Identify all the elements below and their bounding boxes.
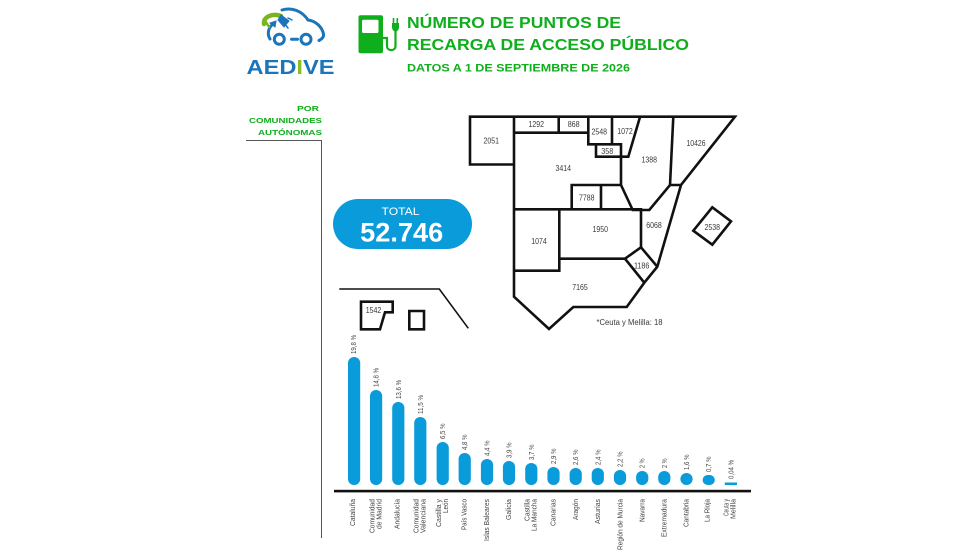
- category labels: Valenciana: [418, 498, 428, 533]
- section heading: por comunidades autónomas: AUTÓNOMAS: [258, 128, 322, 137]
- section heading: por comunidades autónomas: [249, 104, 322, 137]
- category labels: Comunidad: [368, 499, 376, 533]
- map values: 7788: [579, 194, 595, 202]
- icon: electric car: [264, 9, 324, 44]
- map outlines: [470, 117, 735, 329]
- percentage labels: 13,6 %: [394, 380, 403, 399]
- map values: 2051: [484, 136, 500, 146]
- footnote: Ceuta y Melilla: *Ceuta y Melilla: 18: [596, 318, 663, 327]
- total callout: [333, 199, 472, 249]
- category labels: Cantabria: [682, 498, 690, 527]
- category labels: Andalucía: [392, 498, 402, 529]
- map values: 1072: [617, 127, 633, 136]
- category labels: Asturias: [593, 499, 602, 524]
- map values: 10426: [686, 139, 706, 148]
- title: RECARGA DE ACCESO PÚBLICO: [407, 36, 689, 54]
- map: tile map of Spain: [339, 117, 735, 329]
- percentage labels: [349, 335, 735, 479]
- category labels: de Madrid: [374, 499, 384, 529]
- bar chart: share by autonomous community: [334, 335, 751, 550]
- category labels: Melilla: [728, 498, 738, 519]
- category labels: Extremadura: [660, 498, 668, 537]
- category labels: Islas Baleares: [482, 499, 491, 541]
- percentage labels: 19,8 %: [349, 335, 358, 354]
- map values: 7165: [572, 283, 588, 292]
- category labels: Región de Murcia: [616, 498, 624, 550]
- category labels: Comunidad: [412, 499, 420, 533]
- map values: 1074: [531, 237, 547, 246]
- map values: 2548: [592, 128, 608, 136]
- category labels: [348, 498, 738, 550]
- category labels: País Vasco: [460, 499, 468, 530]
- logo: AEDIVE: [246, 9, 334, 79]
- percentage labels: 3,7 %: [527, 444, 536, 460]
- category labels: Galicia: [504, 498, 513, 520]
- percentage labels: 1,6 %: [682, 454, 691, 470]
- section heading: por comunidades autónomas: POR: [297, 104, 320, 113]
- title: [407, 14, 689, 54]
- map values: 1388: [642, 156, 658, 164]
- total callout: TOTAL: [382, 206, 420, 218]
- subtitle: date: DATOS A 1 DE SEPTIEMBRE DE 2026: [407, 62, 630, 74]
- percentage labels: 2 %: [660, 458, 669, 468]
- title: NÚMERO DE PUNTOS DE: [407, 14, 621, 32]
- percentage labels: 6,5 %: [438, 423, 447, 439]
- map inset: Canarias: 1542: [366, 306, 382, 315]
- map values: [484, 120, 721, 292]
- percentage labels: 0,7 %: [704, 456, 713, 472]
- category labels: Aragón: [571, 499, 580, 520]
- percentage labels: 2,9 %: [549, 448, 558, 464]
- percentage labels: 2,6 %: [571, 449, 580, 465]
- section heading: por comunidades autónomas: COMUNIDADES: [249, 116, 322, 125]
- percentage labels: 3,9 %: [504, 442, 514, 458]
- map values: 1292: [529, 120, 545, 129]
- percentage labels: 0,04 %: [726, 460, 735, 479]
- percentage labels: 4,8 %: [460, 434, 469, 450]
- map values: 2538: [705, 223, 721, 232]
- total callout: 52.746: [360, 218, 443, 248]
- percentage labels: 2 %: [638, 458, 647, 468]
- percentage labels: 14,8 %: [372, 368, 380, 387]
- percentage labels: 4,4 %: [482, 440, 492, 456]
- map values: 6068: [646, 221, 662, 230]
- category labels: Canarias: [548, 499, 558, 526]
- category labels: Castilla y: [434, 499, 443, 527]
- category labels: La Rioja: [702, 498, 712, 522]
- icon: charging station: [358, 15, 399, 53]
- category labels: Navarra: [638, 498, 646, 522]
- map inset: Canarias: [339, 289, 468, 329]
- category labels: León: [441, 499, 450, 513]
- category labels: Cataluña: [348, 498, 357, 526]
- category labels: La Mancha: [530, 498, 538, 531]
- percentage labels: 11,5 %: [416, 395, 425, 414]
- category labels: Castilla: [522, 498, 532, 521]
- map values: 868: [568, 120, 580, 129]
- bars: [348, 357, 737, 485]
- map values: 1186: [634, 262, 650, 270]
- baseline axis: [334, 490, 751, 492]
- category labels: Ceuta y: [722, 499, 730, 516]
- map values: 3414: [556, 164, 572, 173]
- logo wordmark: AED IVE: [246, 57, 334, 79]
- map values: 358: [601, 147, 614, 156]
- percentage labels: 2,2 %: [616, 451, 624, 467]
- map values: 1950: [593, 225, 609, 234]
- percentage labels: 2,4 %: [593, 449, 602, 465]
